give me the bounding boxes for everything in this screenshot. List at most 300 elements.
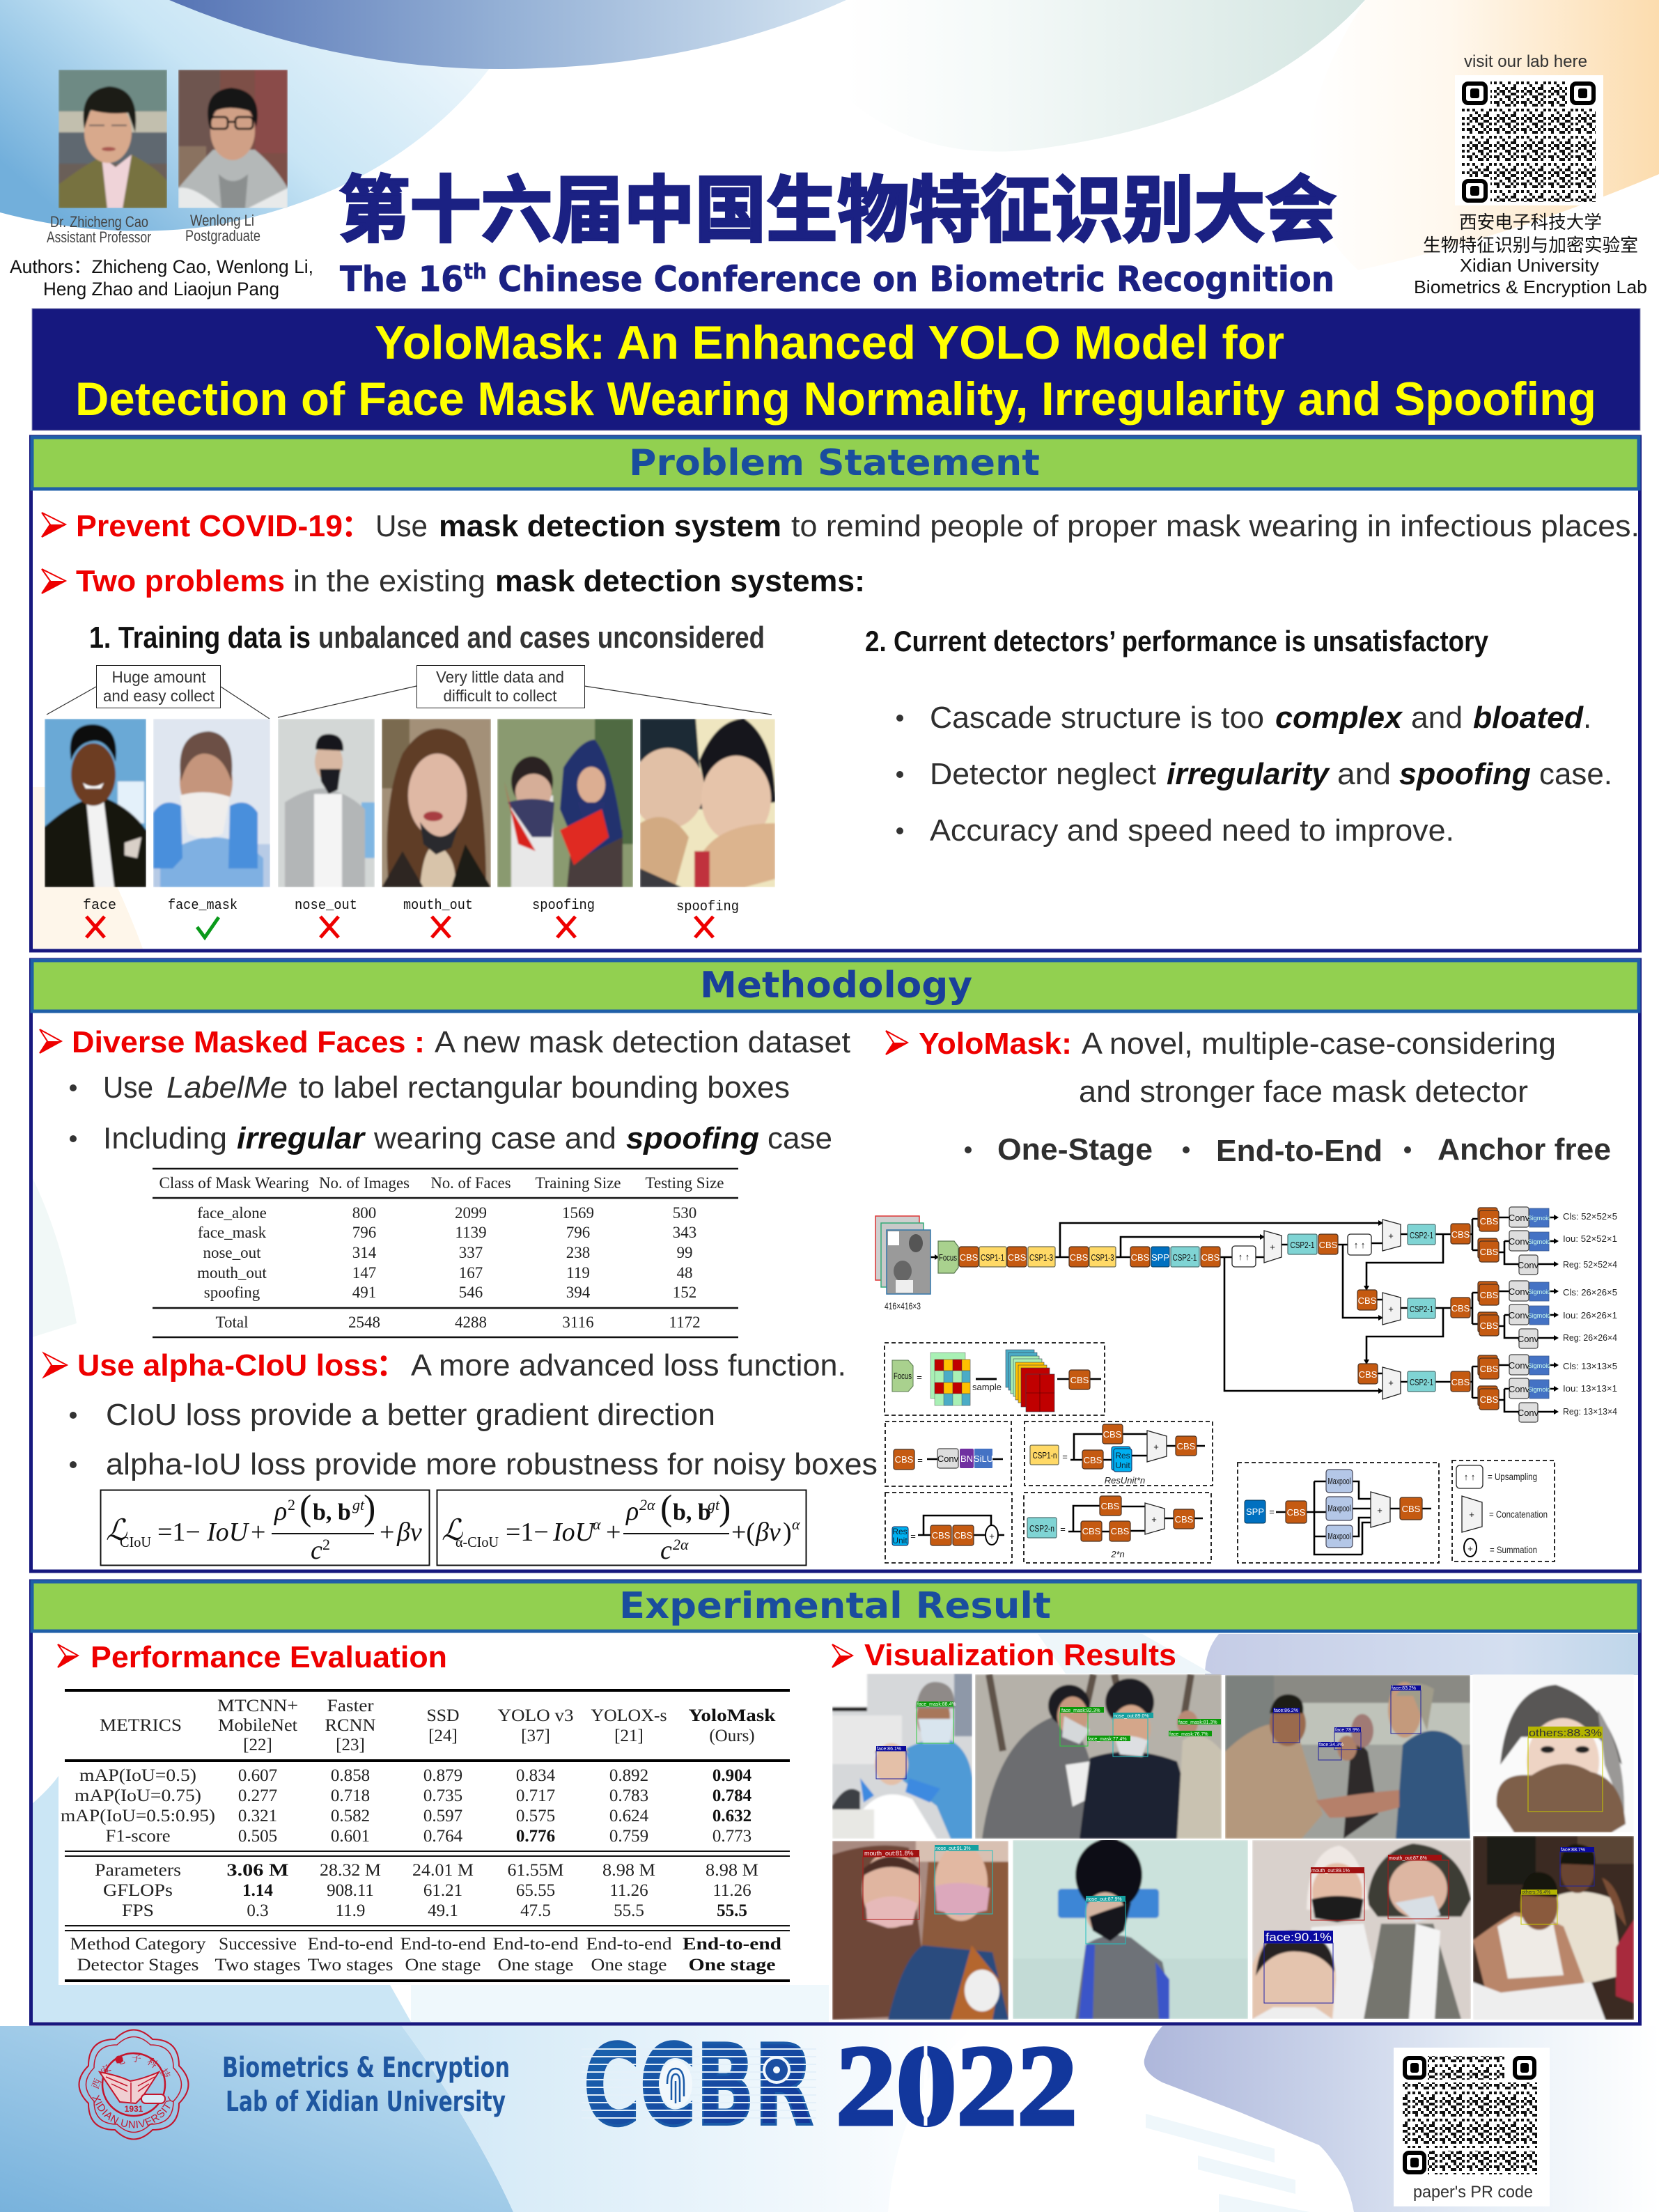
formula: CIoU loss: ) bbox=[364, 1488, 375, 1528]
table: dataset: 1569 bbox=[562, 1204, 594, 1222]
table: comparison metrics: 0.717 bbox=[516, 1786, 555, 1805]
detection head 13: CBS bbox=[1480, 1364, 1499, 1374]
formula: alpha-CIoU loss: α bbox=[792, 1516, 800, 1533]
table: comparison metrics: FPS bbox=[122, 1901, 154, 1920]
author captions: Assistant Professor bbox=[47, 228, 151, 246]
table: comparison metrics: [24] bbox=[428, 1727, 458, 1745]
text: diverse masked faces: to label rectangular bounding boxes bbox=[299, 1070, 790, 1105]
text: yolomask intro: A novel, multiple-case-considering bbox=[1082, 1027, 1556, 1061]
input images bbox=[875, 1216, 930, 1311]
module: legend: + bbox=[1467, 1543, 1473, 1554]
formula: CIoU loss: ( bbox=[299, 1488, 311, 1528]
detection head 13: Iou: 13×13×1 bbox=[1563, 1383, 1617, 1394]
table: comparison metrics: 0.759 bbox=[609, 1827, 648, 1846]
table: comparison metrics: [37] bbox=[521, 1727, 550, 1745]
neck blocks: CBS bbox=[1319, 1240, 1338, 1250]
table: dataset bbox=[153, 1169, 738, 1337]
table: comparison metrics: (Ours) bbox=[709, 1727, 755, 1745]
table: comparison metrics: Two stages bbox=[215, 1956, 301, 1975]
table: dataset: 167 bbox=[459, 1264, 483, 1282]
arrow bullet bbox=[42, 513, 65, 537]
table: comparison metrics: 47.5 bbox=[520, 1901, 551, 1920]
detection boxes: street bbox=[1060, 1707, 1221, 1757]
table: dataset: spoofing bbox=[204, 1284, 260, 1301]
formula: alpha-CIoU loss: =1− bbox=[506, 1518, 549, 1547]
lab affiliation text bbox=[1414, 212, 1647, 297]
table: comparison metrics: SSD bbox=[426, 1706, 460, 1725]
photo: spoofing 1 bbox=[497, 719, 633, 887]
module: CBS: Conv bbox=[937, 1454, 959, 1464]
formula: alpha-CIoU loss: ) bbox=[783, 1518, 792, 1547]
text: diverse masked faces: wearing case and bbox=[373, 1121, 616, 1155]
heading: visualization results: Visualization Results bbox=[864, 1638, 1176, 1672]
table: dataset: 530 bbox=[673, 1204, 696, 1222]
module: CBS: SiLU bbox=[974, 1454, 993, 1464]
neck blocks: + bbox=[1270, 1242, 1275, 1252]
table: comparison metrics: 0.632 bbox=[712, 1807, 751, 1825]
table: comparison metrics: 0.764 bbox=[423, 1827, 463, 1846]
detection boxes: three friends bbox=[1264, 1855, 1449, 2003]
photo: spoofing 2 bbox=[640, 719, 775, 887]
neck blocks: CBS bbox=[1451, 1303, 1470, 1314]
bullet list: detector problems bbox=[896, 701, 1612, 848]
callout: huge amount bbox=[47, 666, 270, 719]
result photo: three friends bbox=[1252, 1840, 1471, 2019]
result photo: basketball players bbox=[1473, 1836, 1634, 2020]
table: comparison metrics: 11.26 bbox=[609, 1881, 648, 1900]
table: comparison metrics: 61.55M bbox=[507, 1861, 564, 1880]
detection boxes: two girls: nose_out:91.3% bbox=[935, 1846, 971, 1851]
formula: alpha-CIoU loss: ) bbox=[719, 1488, 731, 1528]
logo: CCBR 2022: CCBR bbox=[584, 2020, 813, 2151]
text: two problems bbox=[76, 564, 865, 598]
module: SPP: CBS bbox=[1287, 1507, 1306, 1518]
table: comparison metrics: 0.904 bbox=[712, 1766, 752, 1785]
table: dataset: 1139 bbox=[455, 1224, 487, 1241]
module: legend: = Upsampling bbox=[1488, 1471, 1537, 1482]
neck blocks bbox=[1232, 1220, 1470, 1399]
logo: CCBR 2022: 2022 bbox=[836, 2022, 1077, 2149]
neck blocks: CSP2-1 bbox=[1290, 1240, 1315, 1250]
formula: alpha-CIoU loss: + bbox=[606, 1518, 621, 1547]
neck blocks: CSP2-1 bbox=[1410, 1230, 1433, 1240]
authors list: Authors：Zhicheng Cao, Wenlong Li, bbox=[10, 256, 313, 277]
bullet list: detector problems: and bbox=[1411, 701, 1463, 735]
table: comparison metrics: 0.776 bbox=[516, 1827, 555, 1846]
author photo: Wenlong Li bbox=[178, 70, 288, 208]
author captions: Wenlong Li bbox=[190, 212, 254, 229]
author photo: Zhicheng Cao bbox=[59, 70, 167, 208]
detection head 13: Sigmoid bbox=[1528, 1386, 1550, 1393]
arrow bullet bbox=[44, 1353, 67, 1377]
table: dataset: Training Size bbox=[535, 1174, 621, 1192]
text: yolomask intro: YoloMask: bbox=[919, 1027, 1072, 1061]
detection boxes: three friends: mouth_out:87.8% bbox=[1389, 1856, 1427, 1861]
lab name: Biometrics & Encryption bbox=[222, 2052, 510, 2084]
table: dataset: Total bbox=[216, 1314, 248, 1331]
table: comparison metrics: mAP(IoU=0.75) bbox=[75, 1786, 201, 1805]
connector lines bbox=[930, 1215, 1559, 1415]
photo labels: face bbox=[83, 898, 116, 914]
module: SPP: SPP bbox=[1246, 1506, 1264, 1517]
table: comparison metrics: 11.26 bbox=[712, 1881, 751, 1900]
neck blocks: CBS bbox=[1451, 1377, 1470, 1387]
module: CSP1-n: ResUnit*n bbox=[1105, 1475, 1145, 1486]
formula: alpha-CIoU loss: gt bbox=[708, 1496, 720, 1513]
detection boxes: two girls bbox=[863, 1845, 992, 1919]
subheading 1: unbalanced and cases unconsidered bbox=[318, 621, 765, 655]
module: CSP1-n: Unit bbox=[1115, 1461, 1130, 1470]
table: dataset: No. of Images bbox=[319, 1174, 410, 1192]
module: CSP1-n: CBS bbox=[1103, 1429, 1122, 1440]
backbone blocks: CSP1-3 bbox=[1091, 1252, 1114, 1263]
subheading 1: 1. Training data is bbox=[89, 621, 311, 655]
module: SPP: = bbox=[1269, 1506, 1275, 1517]
backbone blocks: CSP1-3 bbox=[1029, 1252, 1053, 1263]
module: CSP1-n: Res bbox=[1115, 1451, 1130, 1461]
heading: performance evaluation: Performance Evaluation bbox=[91, 1640, 447, 1674]
formula: CIoU loss: 2 bbox=[288, 1496, 295, 1513]
module: ResUnit: Unit bbox=[892, 1536, 908, 1545]
module: Focus: = bbox=[917, 1372, 922, 1382]
table: comparison metrics: One stage bbox=[405, 1956, 481, 1975]
detection boxes: three friends: face:90.1% bbox=[1265, 1931, 1332, 1944]
logo: Xidian University seal: XIDIAN UNIVERSITY bbox=[92, 2095, 173, 2128]
lab affiliation text: Biometrics & Encryption Lab bbox=[1414, 276, 1647, 297]
module: legend: = Concatenation bbox=[1489, 1509, 1548, 1520]
lab name bbox=[222, 2052, 510, 2118]
detection head 52: Iou: 52×52×1 bbox=[1563, 1233, 1617, 1244]
detection head 52: Cls: 52×52×5 bbox=[1563, 1211, 1617, 1222]
module: CSP2-n: CSP2-n bbox=[1029, 1523, 1054, 1534]
detection head 52: Conv bbox=[1509, 1213, 1530, 1223]
table: dataset: Testing Size bbox=[645, 1174, 724, 1192]
detection head 13: Sigmoid bbox=[1528, 1362, 1550, 1369]
table: comparison metrics: Faster bbox=[327, 1697, 374, 1715]
module: legend: = Summation bbox=[1490, 1544, 1537, 1555]
module: SPP: CBS bbox=[1402, 1504, 1421, 1514]
table: comparison metrics: [21] bbox=[614, 1727, 644, 1745]
detection head 26: Iou: 26×26×1 bbox=[1563, 1310, 1617, 1321]
module: CSP2-n bbox=[1024, 1493, 1211, 1563]
detection head 13: Cls: 13×13×5 bbox=[1563, 1361, 1617, 1371]
table: comparison metrics: Two stages bbox=[308, 1956, 393, 1975]
table: dataset: face_mask bbox=[198, 1224, 267, 1241]
formula: alpha-CIoU loss: 2α bbox=[673, 1536, 689, 1553]
table: dataset: 1172 bbox=[669, 1314, 701, 1331]
table: comparison metrics: mAP(IoU=0.5) bbox=[79, 1766, 196, 1785]
module: CSP1-n: CSP1-n bbox=[1032, 1450, 1057, 1461]
table: comparison metrics: 65.55 bbox=[516, 1881, 555, 1900]
photo: mouth_out bbox=[382, 719, 491, 887]
module: CSP2-n: CBS bbox=[1175, 1514, 1194, 1525]
result photo: street bbox=[975, 1674, 1222, 1839]
callout: huge amount: Huge amount bbox=[111, 668, 206, 686]
detection head 52 bbox=[1478, 1207, 1617, 1275]
table: dataset: 546 bbox=[459, 1284, 483, 1301]
table: comparison metrics: 0.3 bbox=[247, 1901, 269, 1920]
lab QR code top bbox=[1455, 52, 1603, 205]
text: two problems: Two problems bbox=[76, 564, 285, 598]
module: CSP2-n: + bbox=[1151, 1514, 1157, 1525]
detection boxes: street: face_mask:81.3% bbox=[1178, 1720, 1217, 1725]
backbone blocks: CBS bbox=[1131, 1252, 1150, 1263]
table: comparison metrics: 0.718 bbox=[331, 1786, 370, 1805]
table: comparison metrics: 0.321 bbox=[238, 1807, 277, 1825]
table: dataset: 4288 bbox=[455, 1314, 487, 1331]
text: diverse masked faces: spoofing bbox=[626, 1121, 759, 1155]
module: CSP2-n: 2*n bbox=[1110, 1549, 1125, 1559]
arrow bullet bbox=[886, 1031, 908, 1054]
table: comparison metrics: End-to-end bbox=[400, 1935, 486, 1954]
formula: CIoU loss: b, b bbox=[313, 1500, 351, 1525]
authors list bbox=[10, 256, 313, 299]
formula: alpha-CIoU loss: c bbox=[660, 1536, 672, 1565]
backbone blocks: CSP1-1 bbox=[981, 1252, 1004, 1263]
module: ResUnit: = bbox=[910, 1531, 916, 1541]
subheading 2: 2. Current detectors’ performance is unsatisfactory bbox=[865, 625, 1489, 657]
table: comparison metrics: 0.783 bbox=[609, 1786, 648, 1805]
formula: CIoU loss: + bbox=[380, 1518, 394, 1547]
photo labels: mouth_out bbox=[403, 898, 473, 914]
module: ResUnit: CBS bbox=[932, 1530, 951, 1541]
detection boxes: three friends: mouth_out:89.1% bbox=[1311, 1869, 1350, 1874]
table: comparison metrics: Parameters bbox=[95, 1861, 181, 1880]
arrow bullet bbox=[832, 1644, 852, 1667]
table: comparison metrics: End-to-end bbox=[493, 1935, 579, 1954]
table: comparison metrics: One stage bbox=[591, 1956, 667, 1975]
table: comparison metrics: 0.784 bbox=[712, 1786, 752, 1805]
header band: experimental result bbox=[32, 1582, 1639, 1631]
table: comparison metrics: 24.01 M bbox=[412, 1861, 474, 1880]
photo labels: spoofing bbox=[532, 898, 595, 914]
table: comparison metrics: End-to-end bbox=[308, 1935, 394, 1954]
paper QR code: paper's PR code bbox=[1413, 2183, 1533, 2202]
table: comparison metrics: 61.21 bbox=[423, 1881, 462, 1900]
text: prevent covid: Use bbox=[375, 509, 428, 543]
callout: very little: difficult to collect bbox=[443, 687, 557, 705]
text: yolomask intro: One-Stage bbox=[997, 1132, 1153, 1167]
table: comparison metrics: METRICS bbox=[100, 1716, 182, 1735]
formula: CIoU loss: ρ bbox=[274, 1497, 287, 1526]
detection head 26: CBS bbox=[1480, 1290, 1499, 1300]
module: CSP2-n: = bbox=[1060, 1524, 1066, 1534]
module: SPP: Maxpool bbox=[1327, 1476, 1351, 1486]
detection boxes: street: nose_out:89.0% bbox=[1114, 1714, 1149, 1719]
formula: CIoU loss: IoU bbox=[206, 1518, 250, 1547]
table: comparison metrics: 0.834 bbox=[516, 1766, 556, 1785]
table: comparison metrics: 11.9 bbox=[336, 1901, 365, 1920]
formula: CIoU loss: βv bbox=[396, 1518, 422, 1547]
table: comparison metrics: [22] bbox=[243, 1736, 272, 1754]
detection head 13 bbox=[1478, 1355, 1617, 1422]
text: alpha-ciou loss bbox=[70, 1348, 878, 1481]
table: comparison metrics: YoloMask bbox=[688, 1706, 776, 1725]
module: Focus: CBS bbox=[1070, 1375, 1089, 1385]
table: comparison metrics: YOLO v3 bbox=[497, 1706, 574, 1725]
formula: alpha-CIoU loss: βv bbox=[755, 1518, 781, 1547]
text: diverse masked faces: LabelMe bbox=[166, 1070, 288, 1105]
detection boxes: handshake bbox=[1273, 1685, 1421, 1760]
neck blocks: + bbox=[1388, 1231, 1394, 1241]
table: dataset: 147 bbox=[352, 1264, 376, 1282]
table: dataset: 796 bbox=[352, 1224, 376, 1241]
detection boxes: dentist bbox=[876, 1701, 956, 1779]
backbone blocks: CSP2-1 bbox=[1173, 1252, 1197, 1263]
table: comparison metrics: 0.879 bbox=[423, 1766, 462, 1785]
module: legend bbox=[1452, 1461, 1555, 1561]
detection head 13: Conv bbox=[1509, 1384, 1530, 1394]
photo labels: spoofing bbox=[676, 899, 739, 915]
module: CSP2-n: CBS bbox=[1111, 1526, 1130, 1536]
formula: alpha-CIoU loss: IoU bbox=[552, 1518, 596, 1547]
detection boxes: street: face_mask:82.3% bbox=[1061, 1708, 1100, 1713]
table: dataset: 48 bbox=[677, 1264, 692, 1282]
title banner: Detection of Face Mask Wearing Normality, Irregularity and Spoofing bbox=[75, 373, 1596, 426]
title banner: YoloMask: An Enhanced YOLO Model for bbox=[375, 316, 1284, 369]
formula: alpha-CIoU loss: 2α bbox=[639, 1496, 655, 1513]
table: comparison metrics: Detector Stages bbox=[77, 1956, 199, 1975]
table: comparison metrics: 0.607 bbox=[238, 1766, 277, 1785]
neck blocks: + bbox=[1388, 1378, 1394, 1388]
table: comparison metrics: 908.11 bbox=[327, 1881, 374, 1900]
neck blocks: ↑ ↑ bbox=[1354, 1240, 1365, 1250]
detection head 26: CBS bbox=[1480, 1321, 1499, 1331]
author captions: Postgraduate bbox=[185, 227, 260, 244]
formula: CIoU loss: ℒ bbox=[106, 1515, 127, 1547]
text: alpha-ciou loss: A more advanced loss function. bbox=[411, 1348, 846, 1382]
heading: methodology: Methodology bbox=[700, 965, 972, 1006]
detection box: nose_out bbox=[1086, 1896, 1126, 1944]
formula: alpha-CIoU loss: ρ bbox=[625, 1497, 639, 1526]
photo labels: nose_out bbox=[295, 898, 357, 914]
author captions bbox=[47, 212, 260, 246]
arrow bullet bbox=[42, 569, 65, 593]
detection head 52: CBS bbox=[1480, 1247, 1499, 1257]
detection head 52: Reg: 52×52×4 bbox=[1563, 1259, 1617, 1270]
lab name: Lab of Xidian University bbox=[226, 2086, 506, 2118]
neck blocks: ↑ ↑ bbox=[1238, 1252, 1249, 1262]
module: CBS bbox=[885, 1422, 1011, 1486]
detection head 13: Conv bbox=[1509, 1360, 1530, 1371]
text: prevent covid: mask detection system bbox=[439, 509, 781, 543]
text: alpha-ciou loss: alpha-IoU loss provide more robustness for noisy boxes bbox=[106, 1447, 878, 1481]
detection head 52: CBS bbox=[1480, 1216, 1499, 1226]
table: comparison metrics: F1-score bbox=[106, 1827, 170, 1846]
table: dataset: 394 bbox=[566, 1284, 591, 1301]
detection boxes: handshake: face:83.2% bbox=[1392, 1686, 1416, 1691]
table: dataset: 238 bbox=[566, 1244, 590, 1261]
logo: CCBR 2022 bbox=[582, 2020, 1077, 2151]
table: comparison metrics: MobileNet bbox=[218, 1716, 297, 1735]
lab affiliation text: Xidian University bbox=[1460, 255, 1599, 276]
formula: CIoU loss: =1− bbox=[157, 1518, 201, 1547]
module: CSP1-n bbox=[1025, 1422, 1213, 1486]
detection boxes: dentist: face_mask:88.4% bbox=[917, 1702, 956, 1707]
table: comparison metrics: One stage bbox=[497, 1956, 574, 1975]
detection boxes: players: others:76.4% bbox=[1522, 1890, 1550, 1895]
neck blocks: CBS bbox=[1451, 1229, 1470, 1240]
module: CSP1-n: CBS bbox=[1177, 1441, 1196, 1451]
table: dataset: mouth_out bbox=[197, 1264, 267, 1282]
bullet list: detector problems: . bbox=[1583, 701, 1591, 735]
module: CBS: = bbox=[917, 1455, 923, 1465]
module: CSP1-n: + bbox=[1153, 1442, 1159, 1452]
result photo: handshake bbox=[1225, 1675, 1470, 1839]
authors list: Heng Zhao and Liaojun Pang bbox=[43, 279, 279, 299]
author captions: Dr. Zhicheng Cao bbox=[50, 213, 148, 231]
detection head 13: CBS bbox=[1480, 1394, 1499, 1405]
neck blocks: CBS bbox=[1358, 1295, 1377, 1306]
module: CSP1-n: CBS bbox=[1084, 1455, 1103, 1465]
table: comparison metrics: 0.597 bbox=[423, 1807, 462, 1825]
table: comparison metrics: 0.575 bbox=[516, 1807, 555, 1825]
lab affiliation text: 生物特征识别与加密实验室 bbox=[1423, 235, 1638, 256]
text: alpha-ciou loss: ： bbox=[376, 1348, 407, 1382]
module: Focus bbox=[885, 1343, 1105, 1415]
conference title English: th bbox=[464, 260, 487, 284]
module: Focus: Focus bbox=[894, 1371, 912, 1381]
module: CSP2-n: CBS bbox=[1082, 1526, 1101, 1536]
backbone blocks bbox=[938, 1241, 1220, 1273]
text: diverse masked faces: Including bbox=[103, 1121, 227, 1155]
text: diverse masked faces: irregular bbox=[237, 1121, 366, 1155]
conference title Chinese: 第十六届中国生物特征识别大会 bbox=[338, 151, 1337, 256]
bullet list: detector problems: bloated bbox=[1473, 701, 1584, 735]
module: ResUnit: Res bbox=[892, 1527, 908, 1536]
panel: experimental result bbox=[31, 1581, 1639, 2024]
detection boxes: street: face_mask:76.7% bbox=[1169, 1732, 1208, 1737]
formula: CIoU loss: c bbox=[311, 1536, 322, 1565]
table: dataset: 2548 bbox=[348, 1314, 380, 1331]
table: comparison metrics: End-to-end bbox=[683, 1935, 781, 1954]
table: comparison metrics: 55.5 bbox=[717, 1901, 747, 1920]
module: SPP bbox=[1238, 1463, 1439, 1563]
table: comparison metrics: MTCNN+ bbox=[217, 1697, 298, 1715]
table: dataset: 800 bbox=[352, 1204, 376, 1222]
neck blocks: CBS bbox=[1359, 1369, 1378, 1380]
table: comparison metrics: RCNN bbox=[325, 1716, 376, 1735]
table: comparison metrics: 0.858 bbox=[331, 1766, 370, 1785]
text: diverse masked faces: Use bbox=[103, 1070, 153, 1105]
table: dataset: 152 bbox=[673, 1284, 696, 1301]
table: comparison metrics: GFLOPs bbox=[103, 1881, 173, 1900]
backbone blocks: CBS bbox=[960, 1252, 979, 1263]
paper QR code bbox=[1394, 2048, 1550, 2206]
detection boxes: handshake: face:86.2% bbox=[1274, 1708, 1298, 1713]
result photo: scarf bbox=[1472, 1674, 1634, 1832]
module: ResUnit: + bbox=[989, 1531, 995, 1541]
module: legend: ↑ ↑ bbox=[1464, 1472, 1475, 1482]
header band: problem statement bbox=[32, 437, 1639, 489]
detection boxes: handshake: face:34.3% bbox=[1319, 1743, 1343, 1747]
formula: alpha-CIoU loss: +( bbox=[731, 1518, 755, 1547]
detection boxes: handshake: face:78.9% bbox=[1335, 1728, 1360, 1733]
table: dataset: 99 bbox=[677, 1244, 692, 1261]
detection head 52: Sigmoid bbox=[1528, 1238, 1550, 1245]
backbone blocks: CBS bbox=[1201, 1252, 1220, 1263]
panel: methodology bbox=[31, 960, 1639, 1571]
neck blocks: CSP2-1 bbox=[1410, 1377, 1433, 1387]
formula: alpha-CIoU loss: α bbox=[593, 1516, 601, 1533]
lab affiliation text: 西安电子科技大学 bbox=[1459, 212, 1602, 233]
module: CSP1-n: = bbox=[1062, 1451, 1068, 1462]
text: alpha-ciou loss: CIoU loss provide a better gradient direction bbox=[106, 1398, 715, 1432]
detection boxes: dentist: face:86.1% bbox=[877, 1747, 901, 1752]
table: dataset: 3116 bbox=[562, 1314, 594, 1331]
text: alpha-ciou loss: Use alpha-CIoU loss bbox=[77, 1348, 378, 1382]
module: SPP: Maxpool bbox=[1327, 1531, 1351, 1541]
